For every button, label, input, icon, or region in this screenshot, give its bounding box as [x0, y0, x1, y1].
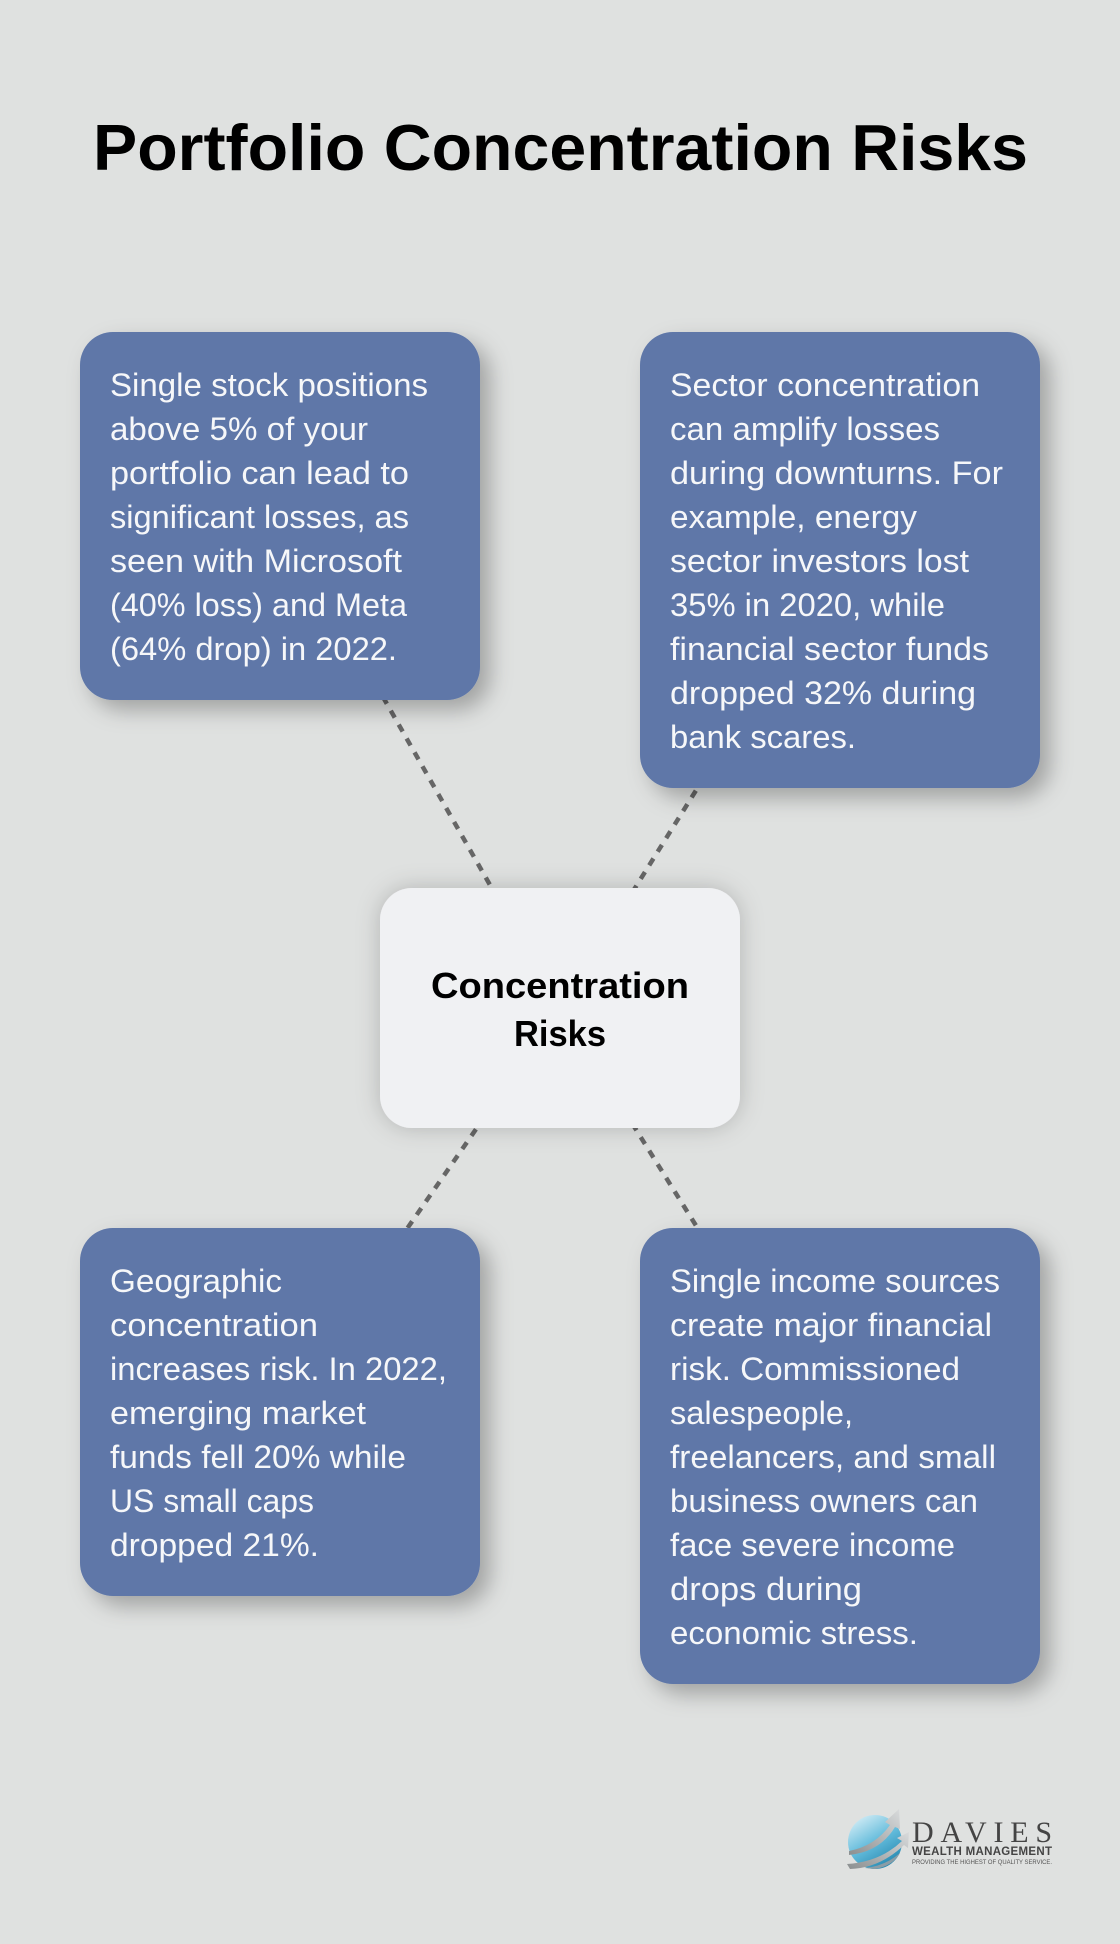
- panel: single income sources: freelancers, and small: [670, 1439, 996, 1475]
- panel: geographic concentration: US small caps: [110, 1483, 314, 1519]
- panel: geographic concentration: [80, 1228, 480, 1596]
- logo: Davies Wealth Management: [847, 1809, 1052, 1869]
- icon: globe with arrows: [847, 1809, 909, 1869]
- panel: sector concentration: can amplify losses: [670, 411, 940, 447]
- panel: center concentration risks: Risks: [514, 1013, 606, 1054]
- panel: single stock positions: [80, 332, 480, 700]
- panel: single stock positions: above 5% of your: [110, 411, 368, 447]
- panel: geographic concentration: emerging market: [110, 1395, 366, 1431]
- panel: single income sources: create major financial: [670, 1307, 992, 1343]
- panel: single income sources: business owners can: [670, 1483, 978, 1519]
- panel: single income sources: face severe income: [670, 1527, 955, 1563]
- panel: sector concentration: dropped 32% during: [670, 675, 976, 711]
- panel: single income sources: drops during: [670, 1571, 862, 1607]
- panel: single income sources: [640, 1228, 1040, 1684]
- panel: geographic concentration: funds fell 20% while: [110, 1439, 406, 1475]
- panel: sector concentration: during downturns. For: [670, 455, 1003, 491]
- dashed connectors: [280, 516, 840, 1456]
- panel: single stock positions: Single stock positions: [110, 367, 428, 403]
- title: Portfolio Concentration Risks: [93, 111, 1028, 184]
- logo: Davies Wealth Management: DAVIES: [912, 1816, 1052, 1849]
- panel: single income sources: economic stress.: [670, 1615, 918, 1651]
- panel: single stock positions: portfolio can lead to: [110, 455, 409, 491]
- panel: single stock positions: seen with Microsoft: [110, 543, 402, 579]
- panel: sector concentration: example, energy: [670, 499, 918, 535]
- panel: geographic concentration: Geographic: [110, 1263, 282, 1299]
- panel: sector concentration: Sector concentration: [670, 367, 980, 403]
- panel: single stock positions: (40% loss) and Meta: [110, 587, 408, 623]
- panel: single income sources: salespeople,: [670, 1395, 853, 1431]
- panel: geographic concentration: dropped 21%.: [110, 1527, 319, 1563]
- panel: geographic concentration: concentration: [110, 1307, 318, 1343]
- panel: sector concentration: 35% in 2020, while: [670, 587, 945, 623]
- logo: Davies Wealth Management: PROVIDING THE HIGHEST OF QUALITY SERVICE.: [912, 1860, 1052, 1866]
- panel: center concentration risks: [380, 888, 740, 1128]
- logo: Davies Wealth Management: WEALTH MANAGEMENT: [912, 1846, 1052, 1858]
- panel: center concentration risks: Concentration: [431, 965, 689, 1006]
- panel: single stock positions: significant losses, as: [110, 499, 409, 535]
- panel: single income sources: Single income sources: [670, 1263, 1000, 1299]
- panel: single income sources: risk. Commissioned: [670, 1351, 960, 1387]
- panel: sector concentration: sector investors lost: [670, 543, 969, 579]
- panel: sector concentration: financial sector funds: [670, 631, 989, 667]
- panel: sector concentration: bank scares.: [670, 719, 856, 755]
- panel: geographic concentration: increases risk. In 2022,: [110, 1351, 447, 1387]
- panel: single stock positions: (64% drop) in 2022.: [110, 631, 397, 667]
- panel: sector concentration: [640, 332, 1040, 788]
